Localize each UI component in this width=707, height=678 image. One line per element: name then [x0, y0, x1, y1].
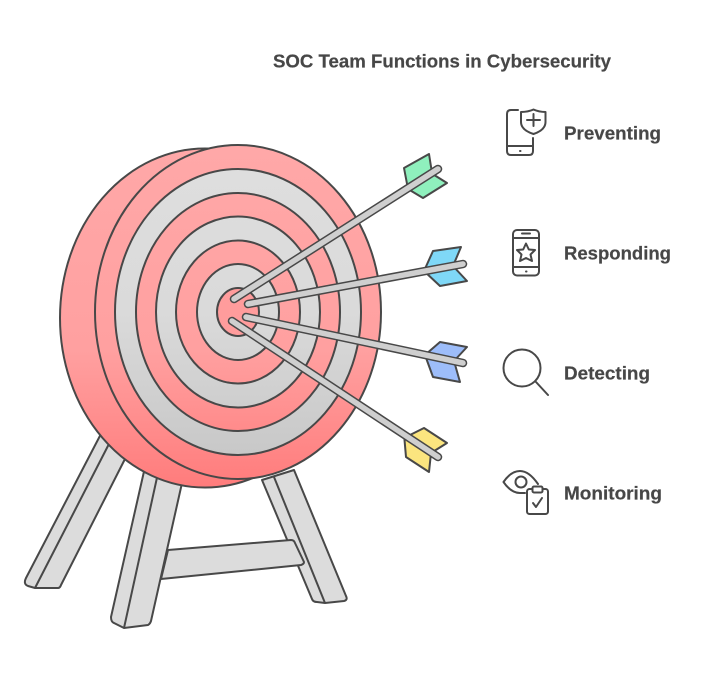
icon: phone with shield: [507, 110, 546, 155]
item: Responding: [513, 230, 671, 276]
item: Detecting: [504, 350, 650, 395]
item: Monitoring: [504, 471, 662, 514]
icon: phone with star: [513, 230, 539, 276]
board back edge: [60, 148, 350, 488]
stand leg: front: [111, 467, 182, 628]
title: SOC Team Functions in Cybersecurity: [273, 52, 611, 72]
arrow: green: [234, 154, 447, 299]
stand crossbar: [161, 540, 304, 579]
stand leg: rear right: [262, 470, 347, 603]
item: Preventing: [507, 110, 661, 155]
label: Responding: [564, 244, 671, 264]
target rings: [95, 145, 381, 479]
arrow: periwinkle: [246, 317, 467, 382]
icon: eye with clipboard: [504, 471, 548, 514]
arrow: yellow: [232, 321, 447, 472]
target stand: [25, 430, 347, 628]
stand leg: left: [25, 430, 127, 588]
label: Detecting: [564, 364, 650, 384]
arrow: blue: [248, 247, 467, 304]
icon: magnifier: [504, 350, 548, 395]
label: Preventing: [564, 124, 661, 144]
label: Monitoring: [564, 484, 662, 504]
target board: [60, 145, 381, 488]
